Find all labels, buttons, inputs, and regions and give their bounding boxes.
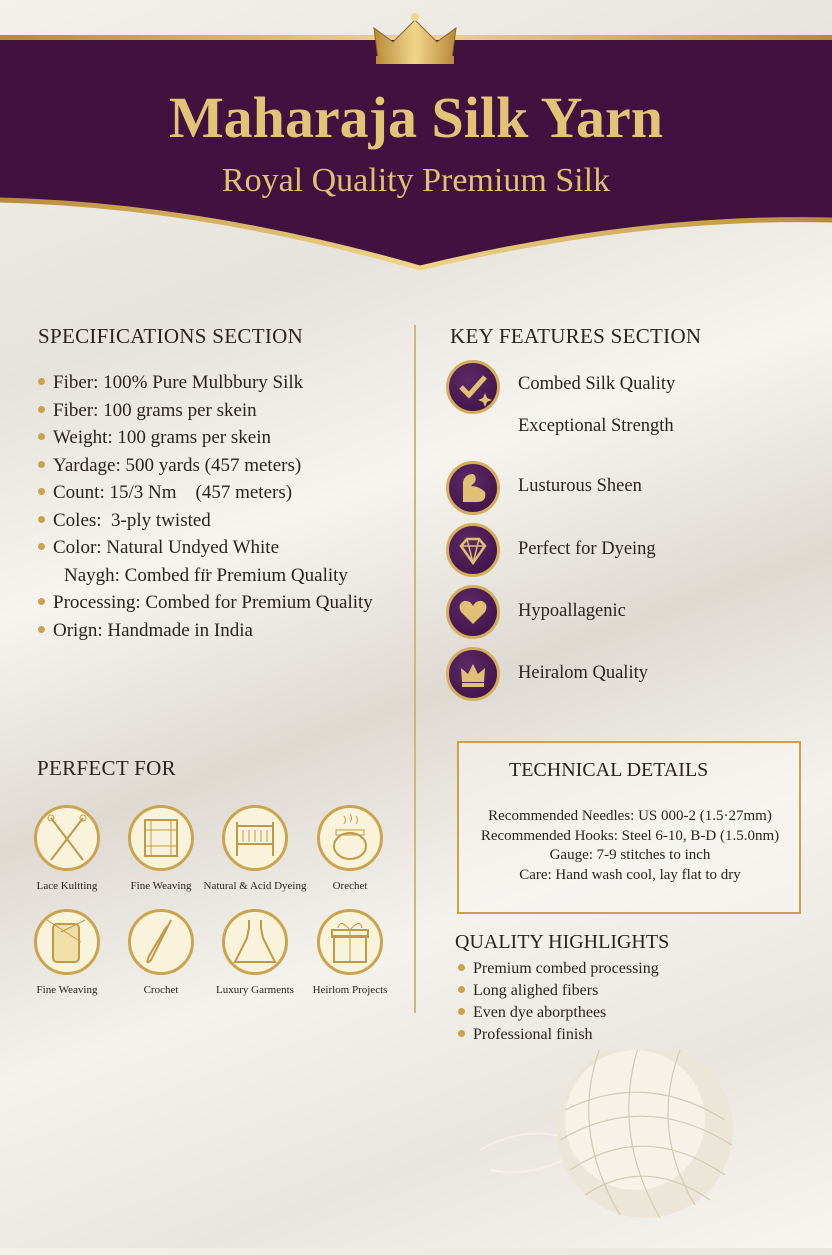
title: Maharaja Silk Yarn — [169, 85, 663, 150]
icon: crown — [374, 13, 456, 64]
yarn ball — [480, 1050, 733, 1218]
text: Crochet — [144, 984, 178, 996]
panel: specifications: Fiber: 100% Pure Mulbbury Silk — [53, 372, 303, 393]
icon: needles — [34, 805, 100, 871]
text: Heiralom Quality — [518, 663, 648, 683]
text: Lace Kultting — [37, 880, 97, 892]
text: Luxury Garments — [216, 984, 294, 996]
panel: specifications: Yardage: 500 yards (457 meters) — [53, 455, 301, 476]
heading: quality highlights: QUALITY HIGHLIGHTS — [455, 931, 669, 953]
panel: specifications: Count: 15/3 Nm (457 meters) — [53, 482, 292, 503]
icon: check — [446, 360, 500, 414]
text: Lusturous Sheen — [518, 476, 642, 496]
text: Exceptional Strength — [518, 416, 674, 436]
text block: technical lines: Care: Hand wash cool, lay flat to dry — [519, 867, 741, 883]
divider — [414, 325, 416, 1013]
text: Natural & Acid Dyeing — [204, 880, 306, 892]
text: Fine Weaving — [131, 880, 191, 892]
icon: crown small — [446, 647, 500, 701]
heading: specifications: SPECIFICATIONS SECTION — [38, 324, 303, 348]
panel: specifications: Fiber: 100 grams per skein — [53, 400, 257, 421]
panel: quality highlights: Professional finish — [473, 1026, 593, 1043]
text block: technical lines: Gauge: 7-9 stitches to inch — [550, 847, 710, 863]
panel: quality highlights: Premium combed processing — [473, 960, 659, 977]
header banner — [0, 13, 832, 271]
icon: gift — [317, 909, 383, 975]
panel: technical details — [457, 741, 801, 914]
text block: technical lines: Recommended Needles: US 000-2 (1.5·27mm) — [488, 808, 772, 824]
heading: technical details: TECHNICAL DETAILS — [509, 759, 708, 781]
text: Heirlom Projects — [313, 984, 387, 996]
panel: quality highlights: Long alighed fibers — [473, 982, 598, 999]
icon: loom — [128, 805, 194, 871]
panel: specifications — [38, 324, 373, 641]
icon: diamond — [446, 523, 500, 577]
panel: quality highlights: Even dye aborpthees — [473, 1004, 606, 1021]
text: Perfect for Dyeing — [518, 539, 656, 559]
icon: pot — [317, 805, 383, 871]
text block: technical lines: Recommended Hooks: Steel 6-10, B-D (1.5.0nm) — [481, 828, 779, 844]
icon: crochet hook — [128, 909, 194, 975]
icon: bench loom — [222, 805, 288, 871]
panel: specifications: Weight: 100 grams per skein — [53, 427, 271, 448]
panel: specifications: Processing: Combed for Premium Quality — [53, 592, 373, 613]
panel: specifications: Orign: Handmade in India — [53, 620, 253, 641]
text: Fine Weaving — [37, 984, 97, 996]
heading: perfect for: PERFECT FOR — [37, 756, 176, 780]
text: Orechet — [333, 880, 367, 892]
icon: dress — [222, 909, 288, 975]
text: Hypoallagenic — [518, 601, 626, 621]
panel: specifications: Naygh: Combed fɪ̈r Premium Quality — [64, 565, 348, 586]
icon: arm — [446, 461, 500, 515]
text block: technical lines — [481, 808, 779, 883]
panel: quality highlights — [455, 931, 669, 1043]
text: Combed Silk Quality — [518, 374, 675, 394]
subtitle: Royal Quality Premium Silk — [222, 162, 610, 199]
heading: key features: KEY FEATURES SECTION — [450, 324, 701, 348]
icon: heart — [446, 585, 500, 639]
panel: specifications: Color: Natural Undyed White — [53, 537, 279, 558]
panel: specifications: Coles: 3-ply twisted — [53, 510, 211, 531]
icon: knitted swatch — [34, 909, 100, 975]
